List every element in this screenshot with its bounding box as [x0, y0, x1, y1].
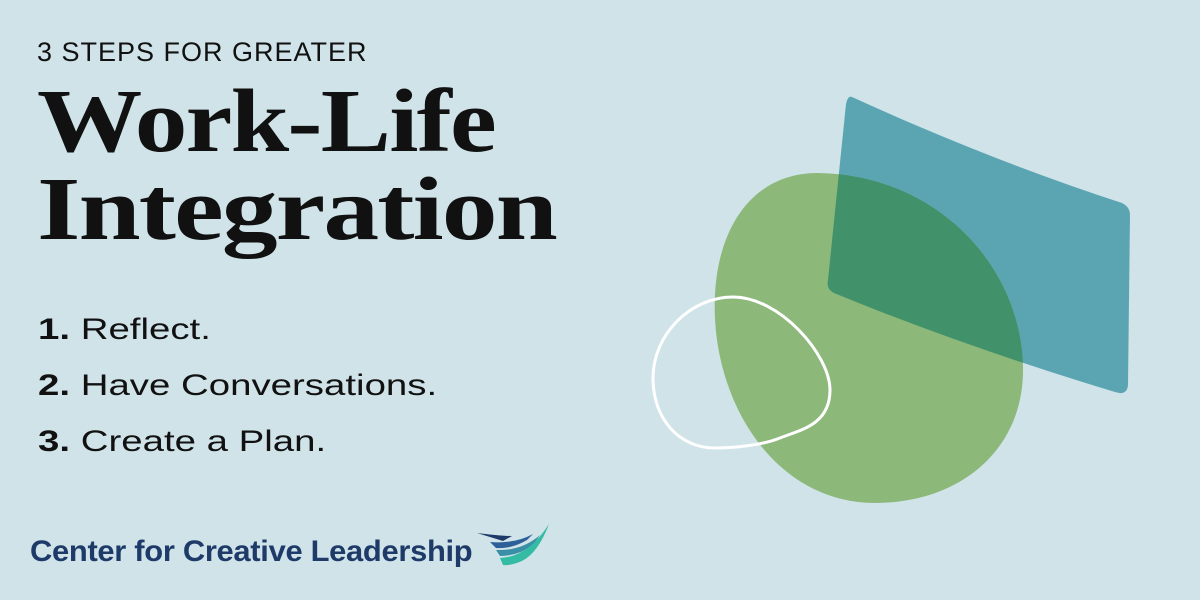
- subtitle: 3 STEPS FOR GREATER: [37, 37, 368, 67]
- steps list: 1. Reflect.: [38, 313, 211, 346]
- logo text: Center for Creative Leadership: [30, 535, 472, 568]
- title: Integration: [37, 160, 556, 259]
- steps list: 3. Create a Plan.: [38, 425, 326, 458]
- steps list: [38, 313, 437, 458]
- steps list: 2. Have Conversations.: [38, 369, 437, 402]
- title: Work-Life: [37, 72, 495, 171]
- icon: logo swoosh: [477, 524, 549, 565]
- title: [37, 72, 556, 259]
- shape: white ring: [653, 297, 830, 448]
- shape: green blob: [715, 173, 1023, 503]
- shape: teal panel: [828, 97, 1130, 393]
